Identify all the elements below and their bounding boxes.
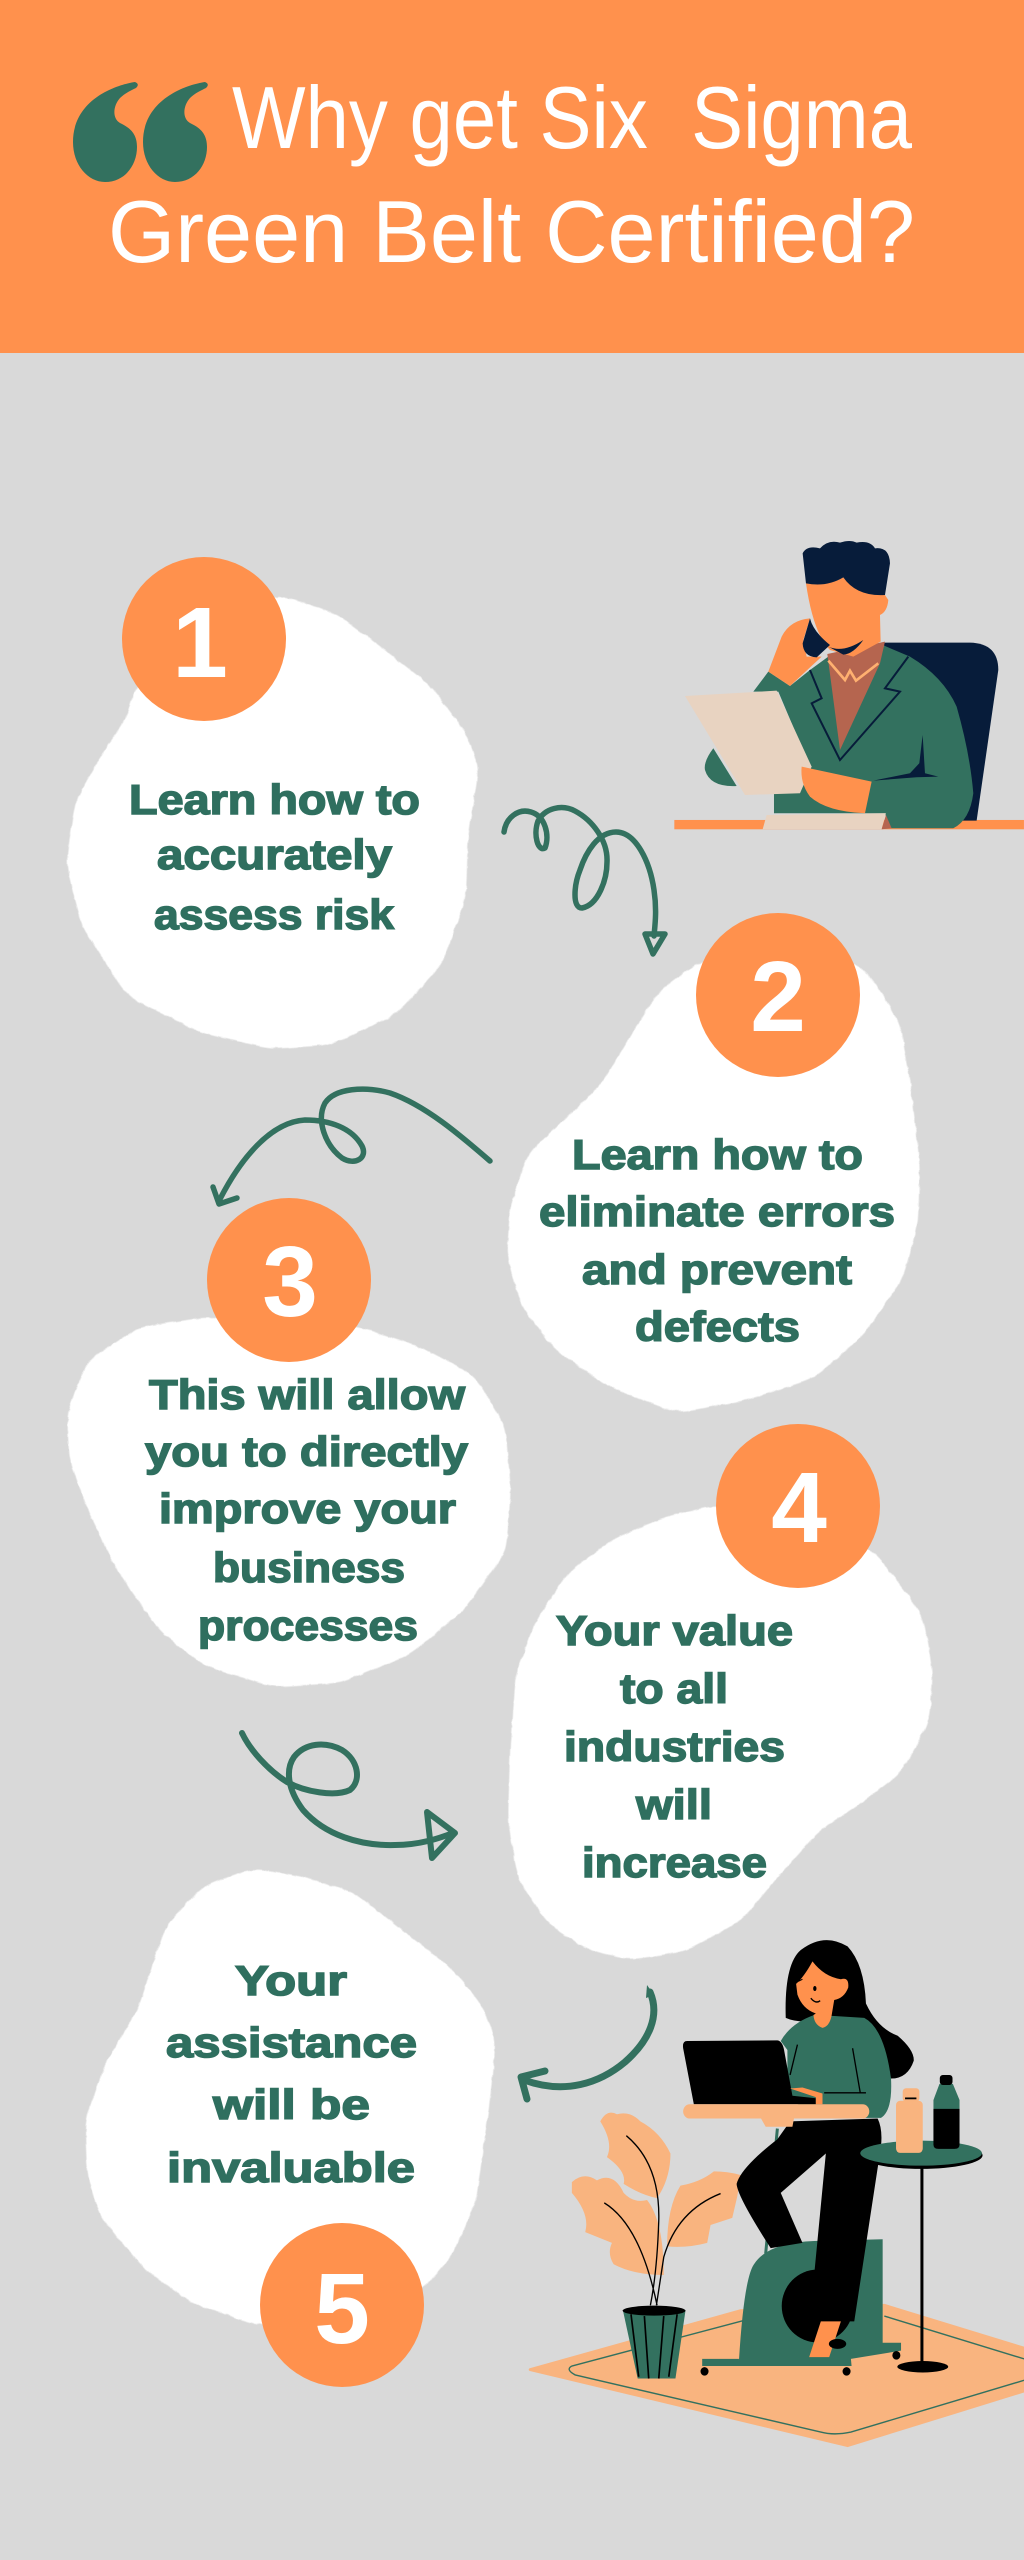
text: step 4: will — [635, 1781, 712, 1828]
illustration: man on the phone reading a document — [674, 541, 1024, 829]
text: step 2: and prevent — [582, 1246, 852, 1293]
plant — [572, 2113, 741, 2379]
panel: step 3 — [67, 1198, 511, 1687]
text: step 2: eliminate errors — [539, 1188, 895, 1235]
number badge 1: 1 — [172, 587, 228, 699]
text: step 5: will be — [212, 2081, 370, 2128]
panel: step 4 — [508, 1424, 933, 1960]
text: step 4: industries — [564, 1723, 785, 1770]
text: step 1 — [129, 776, 420, 938]
text: step 3: business — [213, 1544, 405, 1591]
title: Green Belt Certified? — [108, 182, 915, 281]
text: step 4: increase — [582, 1839, 767, 1886]
woman — [737, 1940, 914, 2357]
laptop and desk — [683, 2040, 869, 2127]
text: step 3: This will allow — [149, 1371, 465, 1418]
title — [108, 68, 915, 281]
arrow: step 3 to 4 — [242, 1733, 455, 1858]
arrow: step 2 to 3 — [213, 1089, 490, 1204]
arrow: step 1 to 2 — [504, 808, 665, 954]
text: step 4: Your value — [556, 1607, 793, 1654]
text: step 5: assistance — [166, 2019, 417, 2066]
text: step 1: accurately — [157, 831, 393, 878]
number badge 4: 4 — [771, 1452, 827, 1564]
text: step 2 — [539, 1131, 895, 1350]
number badge 2 — [696, 913, 860, 1077]
text: step 2: defects — [635, 1303, 800, 1350]
panel: step 1 — [66, 557, 479, 1049]
text: step 3 — [145, 1371, 469, 1649]
title: Why get Six Sigma — [232, 68, 912, 167]
number badge 1 — [122, 557, 286, 721]
number badge 4 — [716, 1424, 880, 1588]
text: step 5: invaluable — [167, 2144, 415, 2191]
number badge 2: 2 — [750, 941, 806, 1053]
header banner — [0, 0, 1024, 353]
text: step 5: Your — [235, 1957, 347, 2004]
text: step 1: assess risk — [154, 891, 395, 938]
arrow: step 4 to 5 — [521, 1985, 654, 2099]
bike — [701, 2129, 901, 2376]
number badge 3: 3 — [262, 1226, 318, 1338]
text: step 4 — [556, 1607, 793, 1886]
number badge 3 — [207, 1198, 371, 1362]
text: step 5 — [166, 1957, 417, 2191]
text: step 4: to all — [620, 1665, 728, 1712]
text: step 1: Learn how to — [129, 776, 420, 823]
number badge 5 — [260, 2223, 424, 2387]
text: step 3: processes — [198, 1602, 418, 1649]
number badge 5: 5 — [314, 2253, 370, 2365]
text: step 2: Learn how to — [572, 1131, 863, 1178]
text: step 3: improve your — [159, 1485, 456, 1532]
side table with bottles — [860, 2075, 983, 2372]
illustration: woman with laptop on exercise bike — [530, 1940, 1024, 2446]
rug — [530, 2305, 1024, 2446]
icon: quotation mark — [73, 82, 208, 182]
panel: step 2 — [507, 913, 920, 1413]
panel: step 5 — [85, 1868, 496, 2387]
text: step 3: you to directly — [145, 1428, 469, 1475]
